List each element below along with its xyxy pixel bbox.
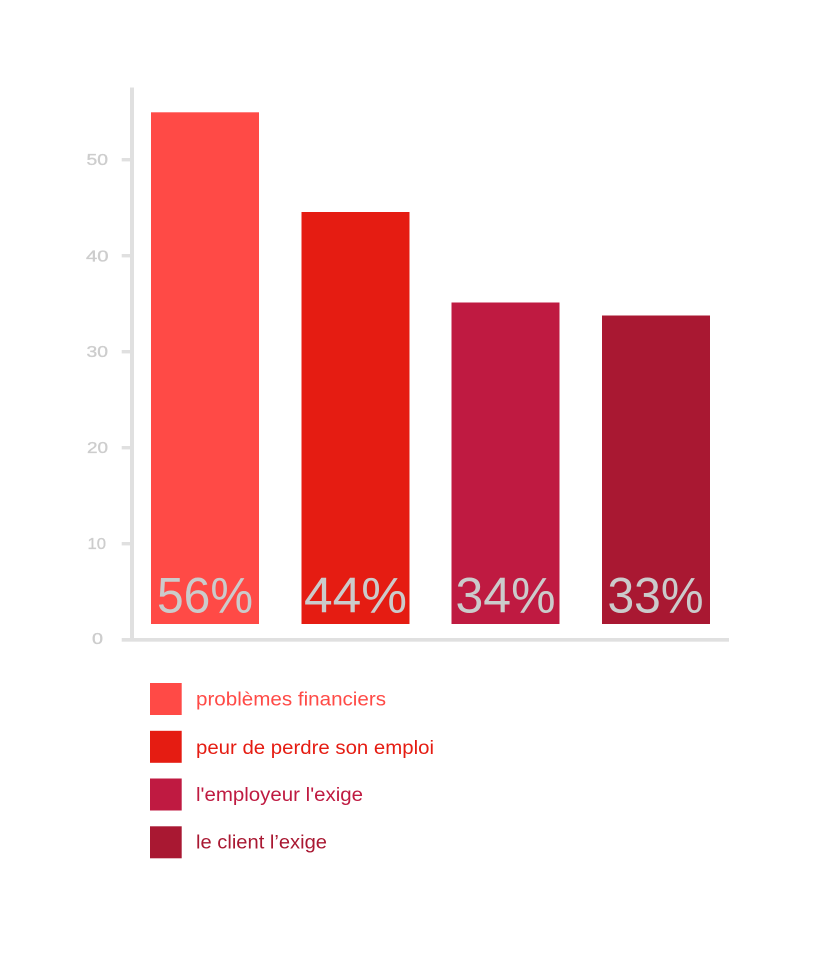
y-axis labels: [86, 152, 109, 648]
legend item: l'employeur l'exige: l'employeur l'exige: [196, 785, 363, 806]
y-axis labels: 20: [87, 440, 108, 457]
legend item: problèmes financiers: problèmes financiers: [196, 690, 386, 711]
legend: [150, 683, 434, 858]
y-axis labels: 10: [88, 536, 106, 553]
bar: le client l'exige 33%: [602, 316, 710, 624]
legend item: peur de perdre son emploi: peur de perdre son emploi: [196, 738, 434, 759]
bar: le client l'exige 33%: 33%: [608, 568, 704, 624]
legend item: le client l'exige: le client l’exige: [196, 833, 327, 854]
legend item: le client l'exige: [150, 826, 327, 858]
bar: l'employeur l'exige 34%: [452, 302, 560, 624]
chart axes: [122, 88, 729, 642]
y-axis labels: 30: [86, 344, 108, 361]
y-axis labels: 50: [86, 152, 108, 169]
bar: peur de perdre son emploi 44%: 44%: [304, 568, 407, 624]
legend item: problèmes financiers: [150, 683, 386, 715]
legend item: peur de perdre son emploi: [150, 731, 434, 763]
bar: peur de perdre son emploi 44%: [302, 212, 410, 624]
bar: l'employeur l'exige 34%: 34%: [456, 568, 556, 624]
bar: problèmes financiers 56%: 56%: [157, 568, 253, 624]
bar: problèmes financiers 56%: [151, 112, 259, 624]
y-axis labels: 40: [86, 248, 109, 266]
y-axis labels: 0: [92, 631, 103, 648]
legend item: l'employeur l'exige: [150, 778, 363, 810]
